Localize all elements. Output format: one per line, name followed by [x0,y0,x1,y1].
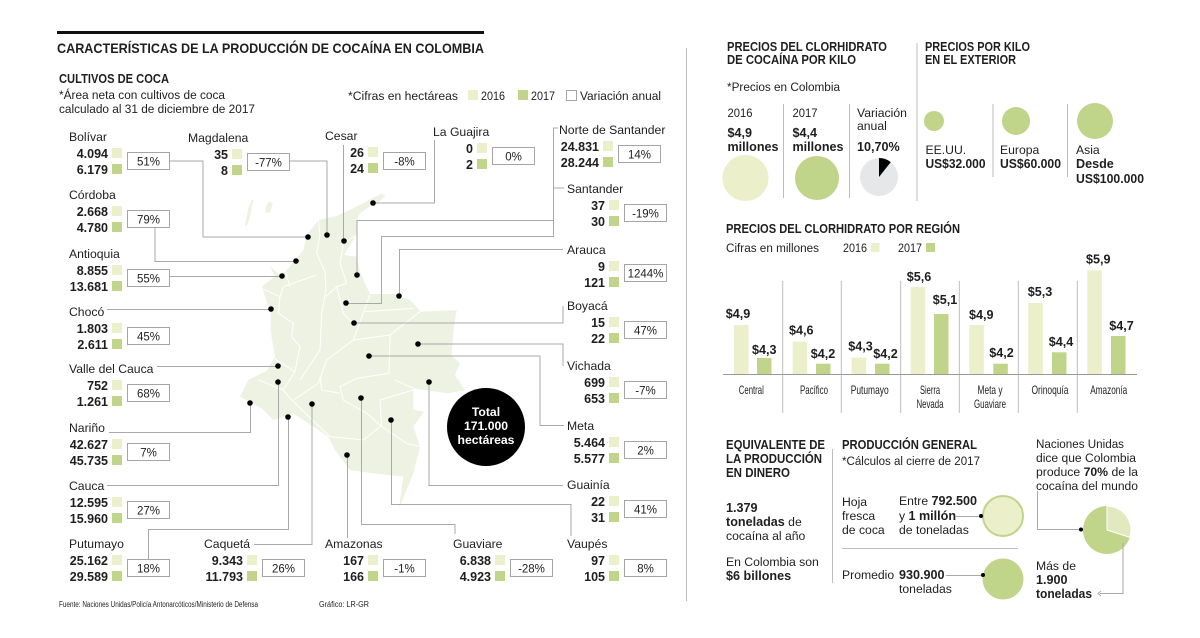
pie chart: world share [1083,506,1131,554]
title: CARACTERÍSTICAS DE LA PRODUCCIÓN DE COCAÍNA EN COLOMBIA [57,39,484,56]
block: Santander: 30 [591,215,605,229]
block: Meta: 5.464 [574,436,605,450]
block: Bolívar: 4.094 [77,147,108,161]
text: tonnes per year: toneladas de [726,515,802,529]
heading: price by region: PRECIOS DEL CLORHIDRATO POR REGIÓN [726,221,960,236]
block: La Guajira: 0% [505,152,522,164]
text: value in pesos: En Colombia son [726,555,819,569]
block: Cesar: 26 [350,146,364,160]
block: Valle del Cauca: 752 [87,379,108,393]
text: more than 1900 tonnes: 1.900 [1036,573,1068,587]
bars: Pacífico: $4,6 [789,324,814,338]
block: Bolívar: 51% [137,156,160,168]
block: Norte de Santander: 14% [628,150,651,162]
price 2017: $4,4 [792,126,817,140]
block: Arauca: 121 [584,276,605,290]
panel: money equivalent [726,438,825,583]
heading: general production: PRODUCCIÓN GENERAL [842,437,977,452]
heading: prices abroad: EN EL EXTERIOR [925,53,1016,67]
block: Antioquia: 13.681 [70,280,108,294]
block: Vaupés: 97 [591,554,605,568]
panel: Colombia prices [722,40,907,201]
connector lines [107,128,571,560]
price: Asia: Asia [1076,143,1100,157]
block: Santander [567,182,666,229]
bars: Central [726,307,777,397]
price: EE.UU. [924,111,986,171]
text: more than 1900 tonnes: Más de [1036,559,1076,573]
bars: Central: $4,9 [726,307,750,321]
block: Nariño: Nariño [69,421,105,435]
block: La Guajira: 0 [466,142,473,156]
block: Caquetá: 11.793 [205,570,243,584]
block: Antioquia: Antioquia [69,247,120,261]
block: Putumayo: 29.589 [70,570,108,584]
bars: Central: $4,3 [752,343,777,357]
bars: Orinoquía [1028,285,1073,397]
block: Amazonas: 167 [343,554,364,568]
connector: UN statement to pie [1038,491,1083,532]
heading: coca crops: CULTIVOS DE COCA [59,72,169,86]
annual variation pie: 10,70% [857,140,900,154]
row: fresh coca leaf: fresca [842,509,875,523]
text: UN statement: Naciones Unidas [1036,437,1124,451]
bars: Putumayo: $4,3 [848,340,873,354]
block: Vichada: -7% [635,386,656,398]
block: Nariño: 42.627 [70,438,108,452]
price: EE.UU.: EE.UU. [926,143,966,157]
block: Bolívar [69,130,170,177]
block: Magdalena: 35 [214,148,228,162]
legend: Variación anual [580,89,661,103]
block: Meta: 2% [637,446,654,458]
bars: Amazonía [1086,253,1134,397]
legend: 2017 [531,89,555,103]
bars: Meta y Guaviare: $4,2 [989,346,1014,360]
block: Boyacá: 47% [634,326,657,338]
block: Valle del Cauca: 1.261 [77,395,108,409]
block: Boyacá: 15 [591,316,605,330]
row: average: 930.900 [899,568,945,582]
legend: price by region: Cifras en millones [726,241,819,255]
total badge: 171.000 [464,419,508,433]
block: Bolívar: Bolívar [69,130,107,144]
block: Amazonas: 166 [343,570,364,584]
block: La Guajira: 2 [466,158,473,172]
note: net area [59,87,255,116]
annual variation pie: Variación [857,106,907,120]
price 2017: 2017 [792,106,818,120]
block: Caquetá: Caquetá [204,537,250,551]
text: tonnes per year: 1.379 [726,501,758,515]
legend: price by region: 2017 [898,241,922,255]
text: tonnes per year: cocaína al año [726,529,806,543]
block: Nariño: 7% [140,448,157,460]
title rule [57,31,484,34]
note: calculations: *Cálculos al cierre de 2017 [842,454,980,468]
price: Asia [1076,103,1144,186]
price 2017 [792,106,844,200]
price 2016: 2016 [728,106,753,120]
block: Guainía: Guainía [567,478,610,492]
bars: Sierra Nevada: Sierra [920,383,940,397]
legend [348,89,661,103]
block: Córdoba: Córdoba [69,188,116,202]
block: Magdalena [188,131,290,178]
row: average [842,558,1024,600]
block: Córdoba: 79% [137,214,160,226]
block: Cesar: -8% [394,156,415,168]
block: Valle del Cauca: Valle del Cauca [69,362,154,376]
block: Norte de Santander: Norte de Santander [559,123,665,137]
block: Guainía: 22 [591,495,605,509]
bar chart [723,253,1137,413]
panel: price by region [723,221,1137,413]
row: fresh coca leaf: de coca [842,523,885,537]
block: Putumayo: 25.162 [70,554,108,568]
block: Magdalena: Magdalena [188,131,249,145]
block: Cauca [69,479,170,526]
total badge: hectáreas [458,433,515,447]
heading: money equivalent: LA PRODUCCIÓN [726,451,822,466]
location dots [247,200,432,458]
bars: Orinoquía: $4,4 [1049,335,1073,349]
bars: Sierra Nevada: $5,6 [907,270,931,284]
block: Chocó: 1.803 [77,322,108,336]
heading: Colombia prices: PRECIOS DEL CLORHIDRATO [727,40,887,54]
legend: 2016 [481,89,505,103]
heading: money equivalent: EN DINERO [726,466,790,480]
block: Caquetá: 9.343 [212,554,243,568]
block: Magdalena: -77% [255,158,282,170]
price: Asia: Desde [1076,157,1114,171]
block: Nariño [69,421,170,468]
text: value in pesos [726,555,819,583]
block: Vichada [567,359,666,406]
bars: Meta y Guaviare: Meta y [978,383,1002,397]
price: Europa: Europa [1000,143,1040,157]
row: fresh coca leaf: de toneladas [899,523,969,537]
row: average: Promedio [842,568,894,582]
block: Norte de Santander: 28.244 [561,156,599,170]
heading: Colombia prices: DE COCAÍNA POR KILO [727,52,856,67]
block: Chocó: 2.611 [77,338,108,352]
block: Putumayo: Putumayo [69,537,124,551]
block: Vaupés: 8% [637,564,654,576]
block: Amazonas [325,537,426,584]
block: Arauca [567,243,666,290]
block: Cesar: Cesar [325,129,358,143]
block: Bolívar: 6.179 [77,163,108,177]
map of Colombia [240,193,465,508]
note: net area: *Área neta con cultivos de coca [59,87,225,102]
block: Guaviare: 6.838 [460,554,491,568]
row: fresh coca leaf: y 1 millón [899,509,956,523]
block: Meta [567,419,666,466]
block: Norte de Santander [559,123,665,170]
total badge [447,388,525,466]
block: Arauca: 1244% [628,268,663,280]
row: average: toneladas [899,582,952,596]
legend: price by region: 2016 [843,241,867,255]
panel: general production [842,437,1024,600]
price 2016: millones [728,140,778,154]
price 2016: $4,9 [728,126,752,140]
text: value in pesos: $6 billones [726,569,791,583]
bars: Meta y Guaviare: $4,9 [969,308,994,322]
bars: Amazonía: Amazonía [1090,383,1127,397]
block: Guaviare: -28% [518,564,545,576]
heading: money equivalent [726,438,825,480]
block: Guainía [567,478,666,525]
block: Vichada: 653 [584,392,605,406]
price: Europa [1000,107,1061,171]
block: La Guajira [433,125,534,172]
block: Guaviare: 4.923 [460,570,491,584]
block: Meta: 5.577 [574,452,605,466]
row: fresh coca leaf [842,494,1023,537]
price 2016 [722,106,778,201]
price: EE.UU.: US$32.000 [926,157,986,171]
block: Valle del Cauca: 68% [137,388,160,400]
bars: Sierra Nevada: Nevada [916,397,944,411]
block: Valle del Cauca [69,362,170,409]
text: more than 1900 tonnes [1036,559,1092,601]
block: Caquetá [204,537,304,584]
bars: Central: Central [739,383,764,397]
heading: prices abroad: PRECIOS POR KILO [925,40,1030,54]
note: net area: calculado al 31 de diciembre de 2017 [59,102,255,116]
panel: prices abroad [924,40,1144,186]
block: Antioquia: 55% [137,274,160,286]
bars: Amazonía: $5,9 [1086,253,1111,267]
legend: *Cifras en hectáreas [348,89,458,103]
block: Vaupés: Vaupés [567,537,607,551]
block: Vichada: Vichada [567,359,611,373]
block: Antioquia: 8.855 [77,264,108,278]
text: UN statement: produce 70% de la [1036,465,1138,479]
block: Vaupés: 105 [584,570,605,584]
panel: coca crops [59,72,666,584]
block: Córdoba: 2.668 [77,205,108,219]
block: Nariño: 45.735 [70,454,108,468]
block: Vaupés [567,537,666,584]
block: Putumayo: 18% [137,564,160,576]
block: Cauca: Cauca [69,479,104,493]
block: Putumayo [69,537,170,584]
block: Cauca: 15.960 [70,512,108,526]
block: Santander: 37 [591,199,605,213]
bars: Orinoquía: Orinoquía [1032,383,1069,397]
block: Arauca: Arauca [567,243,606,257]
price: Asia: US$100.000 [1076,172,1144,186]
text: UN statement: dice que Colombia [1036,451,1136,465]
price: Europa: US$60.000 [1000,157,1061,171]
block: Arauca: 9 [598,260,605,274]
block: Caquetá: 26% [272,564,295,576]
row: fresh coca leaf: Entre 792.500 [899,494,977,508]
block: Cesar: 24 [350,162,364,176]
bars: Putumayo: $4,2 [873,347,898,361]
text: UN statement [1036,437,1138,493]
panel: world share [1036,437,1138,601]
bars: Sierra Nevada: $5,1 [933,293,957,307]
block: Antioquia [69,247,170,294]
block: Chocó: Chocó [69,305,104,319]
block: Guainía: 31 [591,511,605,525]
bars: Pacífico [789,324,835,397]
bars: Amazonía: $4,7 [1109,319,1134,333]
block: Chocó [69,305,170,352]
bars: Pacífico: Pacífico [800,383,828,397]
annual variation pie [857,106,907,196]
bars: Meta y Guaviare: Guaviare [974,397,1006,411]
block: Córdoba: 4.780 [77,221,108,235]
text: more than 1900 tonnes: toneladas [1036,587,1092,601]
annual variation pie: anual [857,119,887,133]
block: Chocó: 45% [137,332,160,344]
heading: prices abroad [925,40,1030,67]
block: Magdalena: 8 [221,164,228,178]
total badge: Total [472,405,500,419]
legend: price by region [726,241,935,255]
block: Amazonas: Amazonas [325,537,383,551]
block: Meta: Meta [567,419,594,433]
source note: Fuente: Naciones Unidas/Policía Antonarcóticos/Ministerio de Defensa [59,600,258,609]
block: Norte de Santander: 24.831 [561,140,599,154]
bars: Orinoquía: $5,3 [1028,285,1052,299]
block: Boyacá [567,299,666,346]
bars: Putumayo: Putumayo [851,383,889,397]
bars: Putumayo [848,340,898,397]
block: Guaviare [453,537,552,584]
note: prices in Colombia: *Precios en Colombia [727,80,840,94]
bars: Sierra Nevada [907,270,957,411]
block: Boyacá: 22 [591,332,605,346]
block: Guaviare: Guaviare [453,537,503,551]
block: Amazonas: -1% [394,564,415,576]
arrow: pie to tonnes [1098,543,1123,596]
block: Boyacá: Boyacá [567,299,608,313]
block: Santander: Santander [567,182,623,196]
text: UN statement: cocaína del mundo [1036,479,1138,493]
block: Cauca: 27% [137,506,160,518]
block: Guainía: 41% [634,504,657,516]
block: Cesar [325,129,426,176]
heading: money equivalent: EQUIVALENTE DE [726,438,825,452]
block: Córdoba [69,188,170,235]
text: tonnes per year [726,501,806,543]
block: La Guajira: La Guajira [433,125,489,139]
block: Cauca: 12.595 [70,496,108,510]
bars: Meta y Guaviare [969,308,1014,411]
heading: Colombia prices [727,40,887,67]
source note: Gráfico: LR-GR [319,600,369,609]
block: Santander: -19% [632,208,659,220]
row: fresh coca leaf: Hoja [842,495,867,509]
bars: Pacífico: $4,2 [811,347,835,361]
block: Vichada: 699 [584,376,605,390]
price 2017: millones [792,140,844,154]
